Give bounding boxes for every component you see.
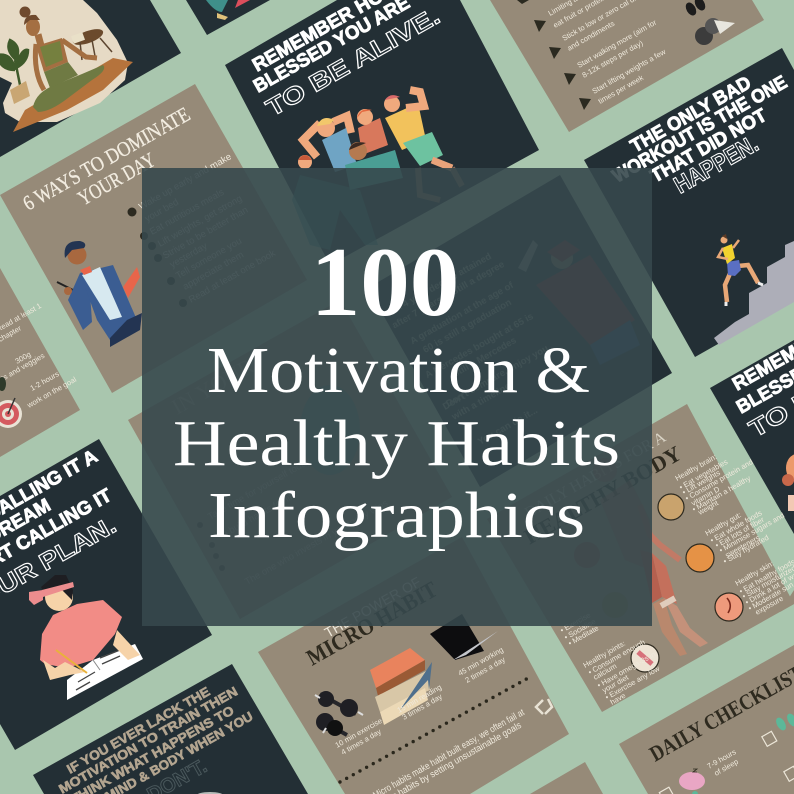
list: six habits: your bed — [143, 197, 181, 225]
ghost illustration — [300, 385, 360, 475]
card: remember right edge — [710, 296, 794, 534]
dotted line — [340, 677, 530, 782]
callout: healthy brain: • Consume protein and — [684, 457, 754, 503]
callout: healthy skin: exposure — [754, 594, 785, 617]
heading: the only bad workout: THAT DID NOT — [647, 105, 771, 187]
card: taupe tips list top right — [490, 0, 764, 132]
icon: target — [0, 398, 22, 428]
ghost text: with a timeline — [449, 381, 512, 423]
callout: healthy brain: vitamin D — [690, 484, 722, 508]
callout: healthy joints: calcium — [592, 661, 618, 682]
callout: healthy brain: • Lift weights — [681, 468, 722, 497]
callout: healthy brain: • Maintain a healthy — [691, 473, 752, 514]
callout: healthy joints: Healthy joints: — [582, 639, 627, 670]
heading: healthy body: HEALTHY BODY — [520, 441, 686, 549]
ghost text: A 4 year degree attained — [393, 251, 494, 315]
callout: healthy gut: Healthy gut: — [704, 510, 743, 538]
heading: the only bad workout: THE ONLY BAD — [627, 73, 755, 157]
ghost text — [390, 251, 551, 448]
labels: micro habit durations: 10 min exercise — [334, 716, 384, 750]
tips list: times per week — [597, 73, 645, 106]
text: goals list: 300g — [14, 350, 33, 366]
callout: healthy brain — [658, 452, 754, 520]
ghost text: 60 is still a graduation — [421, 297, 514, 356]
icon: circle at bottom — [196, 792, 224, 794]
card: power of micro habit — [258, 537, 569, 794]
ghost text: Don't — [441, 391, 468, 413]
text: sleep: 7-9 hours — [706, 747, 738, 771]
tips list: Start walking more (aim for — [576, 18, 658, 70]
icon: leaf — [0, 377, 6, 391]
callout: healthy heart partial list: • Meditate — [567, 623, 600, 648]
labels: micro habit durations: 2 times a day — [464, 655, 507, 685]
callout: healthy skin — [715, 557, 794, 621]
ghost list: To build habits for life — [216, 489, 299, 543]
checkboxes — [659, 731, 794, 794]
icon: dumbbells — [315, 691, 363, 736]
text: sleep: of sleep — [713, 757, 740, 778]
illustration: runner — [718, 234, 763, 306]
card: yoga illustration — [0, 0, 181, 157]
ghost list: The one who invests in you today wins — [243, 498, 390, 588]
bullets — [128, 208, 187, 307]
heading: remember how blessed you are — [249, 0, 445, 122]
callout: healthy gut: • Eat whole foods — [709, 508, 764, 545]
heading: 6 ways to dominate: 6 WAYS TO DOMINATE — [19, 102, 194, 215]
illustration: group of fit people — [292, 90, 462, 250]
callout: healthy gut: • Stay hydrated — [722, 533, 770, 566]
ghost text: A Mercedes bought at 65 is — [423, 311, 535, 381]
labels: micro habit durations — [334, 645, 507, 757]
ghost text: Don't compare, enjoy you — [444, 343, 551, 410]
callout: healthy gut: • Eat lots of fiber — [714, 515, 766, 550]
card: small dark top card — [186, 0, 270, 35]
callout: healthy brain: weight — [696, 498, 721, 517]
heading: the power of micro habit: MICRO HABIT — [302, 577, 442, 670]
heading: 6 ways to dominate: YOUR DAY — [74, 148, 159, 210]
icon: stack of books — [370, 648, 432, 725]
card: left lower taupe — [0, 268, 80, 457]
callout: healthy skin: Healthy skin: — [734, 559, 775, 588]
illustration: stairs — [714, 241, 794, 345]
heading: the power of micro habit: THE POWER OF — [322, 574, 423, 641]
callout: healthy gut: • Minimise sugars and — [718, 511, 786, 555]
card: motivation to train — [33, 664, 308, 794]
callout: healthy brain: • Eat vegetables — [678, 457, 729, 492]
ghost list: Take time for yourself today — [206, 456, 313, 523]
callout: healthy joints: your diet — [601, 672, 631, 695]
illustration: man with clipboard — [57, 241, 142, 347]
list: six habits: Wake up early and make — [137, 151, 234, 213]
text: goals list — [0, 301, 78, 410]
ghost list — [197, 456, 390, 588]
title: Motivation & — [207, 334, 590, 407]
callout: healthy joints — [582, 637, 662, 707]
callout: healthy heart partial list: • Socialise — [563, 617, 597, 642]
card: calling it a dream — [0, 439, 212, 750]
callout: healthy gut — [686, 508, 786, 572]
callout: healthy heart partial list — [559, 542, 628, 648]
heading: remember how blessed you are: TO BE ALIVE. — [262, 3, 445, 122]
ghost text: after 7 years is still a degree — [390, 259, 506, 331]
list: six habits: Strive to be better than — [161, 205, 250, 262]
card: 6 ways to dominate your day — [0, 84, 307, 393]
title: Healthy Habits — [173, 407, 620, 480]
callout: healthy gut: sweeteners — [724, 533, 762, 560]
heading: in your: IN YOUR — [167, 353, 258, 419]
icon: footprints and kettlebell — [684, 0, 735, 45]
ghost text: A graduation at the age of — [408, 280, 516, 347]
labels: micro habit durations: 3 times a day — [401, 692, 444, 722]
callout: healthy heart partial list: • Exercise — [559, 610, 592, 635]
tips list — [547, 0, 668, 106]
labels: micro habit durations: 45 min working — [457, 645, 505, 678]
ghost text: still a Mercedes — [451, 335, 518, 379]
card: small taupe bottom — [530, 762, 603, 794]
heading: if you ever lack the motivation: IF YOU EVER LACK THE — [64, 684, 213, 777]
list: six habits: Tell someone you — [174, 236, 244, 282]
illustration: muscle anatomy figure — [593, 458, 708, 656]
heading: the only bad workout: HAPPEN. — [670, 130, 763, 199]
title — [173, 228, 620, 552]
text: goals list: work on the goal — [25, 375, 78, 410]
card: daily habits for a healthy body — [487, 404, 794, 712]
illustration: partial figure — [782, 454, 794, 511]
callout: healthy joints: • Have omega-3s in — [596, 650, 657, 690]
list: six habits: Lift weights, get strong — [156, 193, 244, 250]
arrow bullets — [517, 0, 591, 110]
central translucent panel — [142, 168, 652, 626]
heading: healthy body: DAILY HABITS FOR A — [522, 428, 669, 522]
icon: small arrows — [536, 699, 552, 714]
title: 100 — [311, 228, 459, 337]
card: daily checklist — [619, 645, 794, 794]
callout: healthy joints: have — [609, 691, 627, 707]
callout: healthy joints: • Consume enough — [587, 637, 647, 677]
illustration: man writing in book — [29, 575, 143, 700]
callout: healthy skin: • Moderate sun — [747, 580, 794, 613]
labels: micro habit durations: 15 min reading — [396, 682, 443, 715]
ghost graduate figure — [518, 240, 640, 365]
card: remember how blessed — [225, 0, 539, 265]
ghost text: You can do it... — [476, 405, 540, 448]
list: six habits: appreciate them — [181, 249, 246, 293]
card: graduation ghost card behind panel — [368, 175, 672, 487]
icon: footprints — [774, 712, 794, 732]
callout: healthy joints: • Exercise any low — [604, 664, 662, 702]
tips list: 8-12k steps per day) — [581, 38, 645, 80]
list: six habits: Eat nutritious meals — [148, 187, 226, 238]
icon: laptop — [430, 614, 498, 660]
title: Infographics — [208, 479, 585, 552]
list: six habits: Read at least one book — [187, 248, 278, 306]
heading: calling it a dream — [0, 446, 121, 620]
tips list: Start lifting weights a few — [591, 47, 668, 96]
text: goals list: 1-2 hours — [29, 369, 61, 393]
card: only bad workout — [584, 48, 794, 357]
icon: sleeping brain — [679, 769, 705, 794]
tips list: and condiments — [566, 19, 616, 53]
card: ghost habits card behind panel — [128, 300, 452, 619]
labels: micro habit durations: 4 times a day — [340, 727, 383, 757]
list: six habits: yesterday — [168, 241, 210, 271]
heading: if you ever lack the motivation: MOTIVATION TO TRAIN THEN — [56, 684, 240, 794]
heading: remember repeated — [729, 296, 794, 443]
list: six habits — [137, 151, 278, 306]
callout: healthy brain: Healthy brain: — [674, 452, 718, 483]
